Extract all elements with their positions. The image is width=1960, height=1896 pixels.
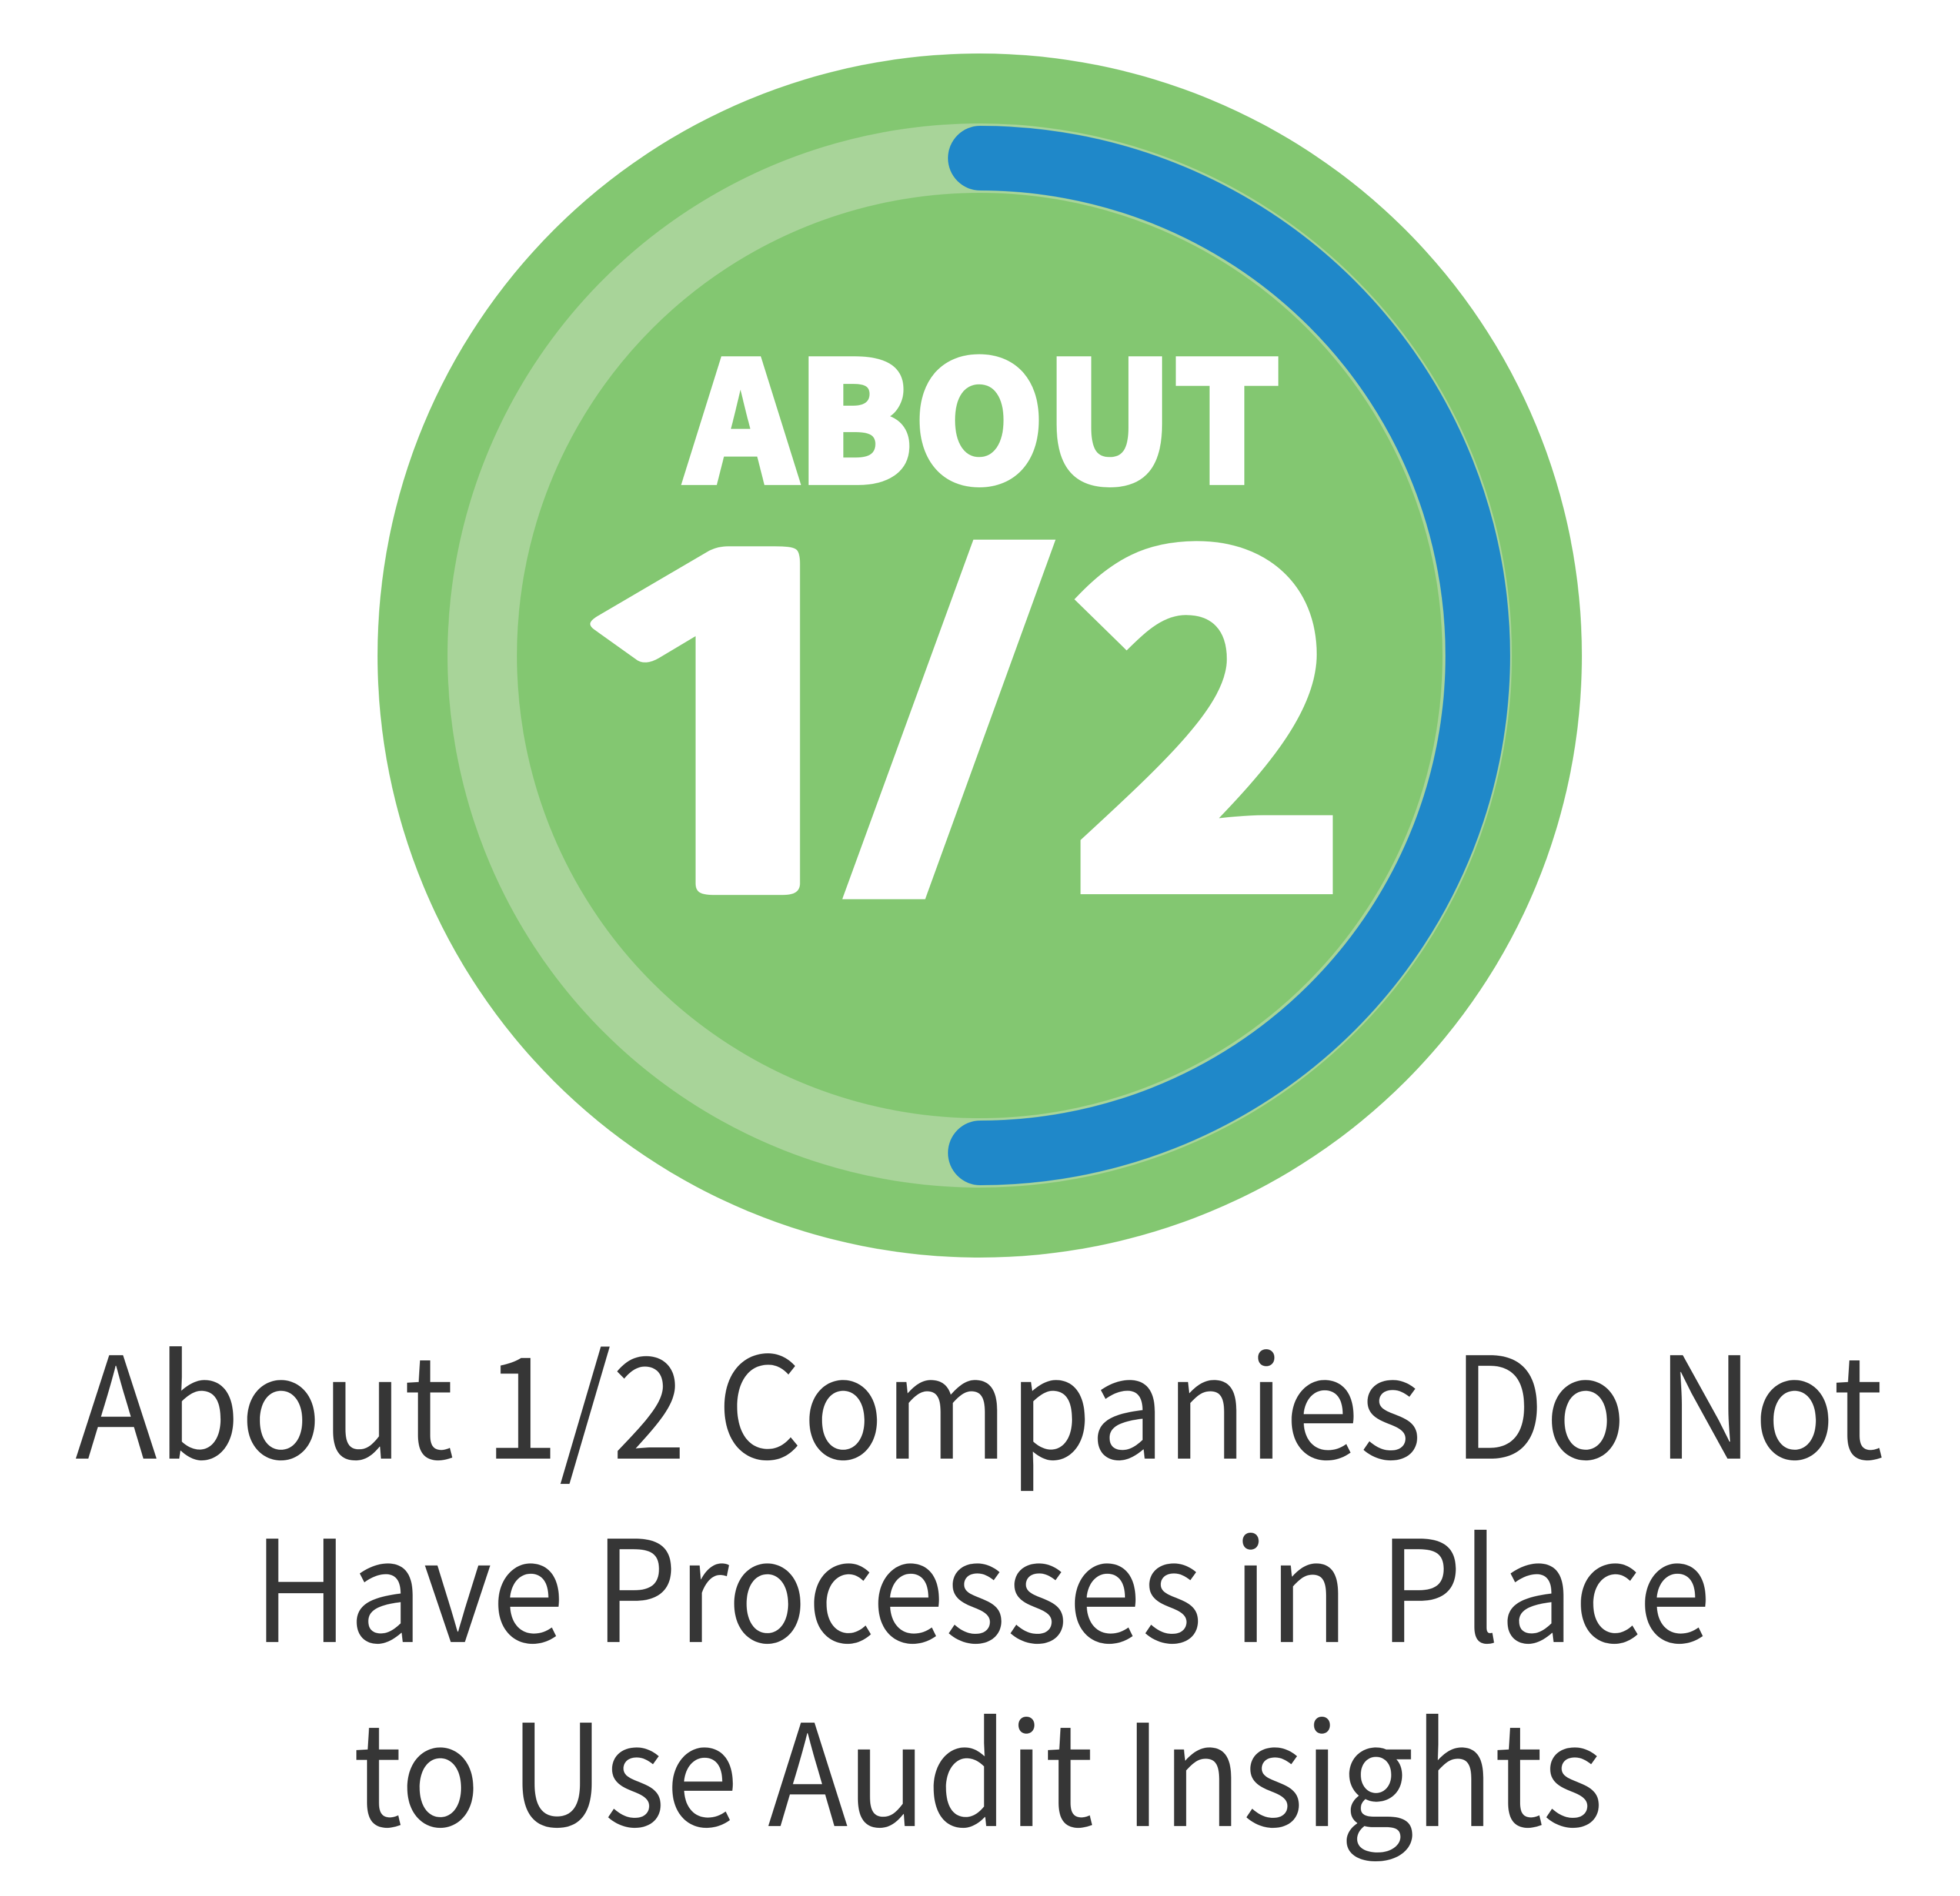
caption line 3: to Use Audit Insights xyxy=(353,1663,1604,1867)
caption text xyxy=(75,1296,1884,1867)
heading: ABOUT: ABOUT xyxy=(683,290,1281,531)
panel: green circle xyxy=(378,53,1582,1258)
caption line 2: Have Processes in Place xyxy=(253,1479,1711,1683)
progress arc: one half xyxy=(980,158,1478,1153)
big number: 1/2 xyxy=(519,351,1352,1024)
digit 1: 1 xyxy=(519,512,947,955)
ring track xyxy=(482,158,1477,1153)
caption line 1: About 1/2 Companies Do Not xyxy=(75,1296,1884,1500)
digit 2: 2 xyxy=(1066,351,1352,1024)
slash: / xyxy=(843,423,1066,932)
